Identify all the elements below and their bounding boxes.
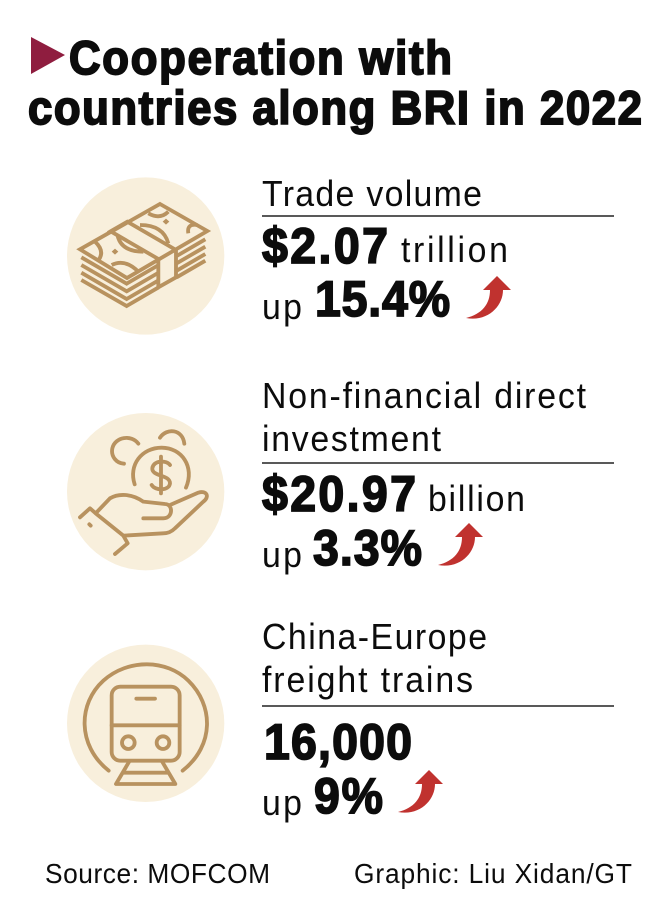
- label: non-financial direct investment: Non-financial direct: [262, 376, 586, 416]
- label: China-Europe freight trains: China-Europe: [262, 617, 487, 657]
- icon: red up arrow: [466, 276, 511, 319]
- graphic credit: Graphic: Liu Xidan/GT: [354, 857, 632, 889]
- panel: China-Europe freight trains: freight trains: [262, 660, 473, 700]
- panel: non-financial direct investment: [67, 376, 614, 576]
- icon: hand holding coin: [67, 413, 224, 570]
- label: trade volume: Trade volume: [262, 174, 482, 214]
- icon: title triangle marker: [31, 37, 65, 74]
- panel: China-Europe freight trains: [67, 617, 614, 824]
- change: up 15.4%: up: [262, 287, 302, 327]
- title: [28, 32, 642, 134]
- panel: trade volume: [67, 174, 614, 335]
- source credit: Source: MOFCOM: [45, 857, 270, 889]
- icon: stack of money: [67, 177, 224, 335]
- panel: trade volume: 15.4%: [315, 271, 450, 327]
- panel: non-financial direct investment: investment: [262, 419, 441, 459]
- value: 16,000: 16,000: [264, 714, 412, 770]
- icon: train: [67, 645, 224, 802]
- icon: red up arrow: [438, 523, 483, 566]
- title: Cooperation with: [69, 32, 452, 84]
- panel: trade volume: trillion: [401, 230, 508, 270]
- value: 2.07 trillion: $2.07: [262, 218, 388, 274]
- icon: red up arrow: [398, 770, 443, 813]
- panel: China-Europe freight trains: 9%: [314, 768, 383, 824]
- change: up 9%: up: [262, 783, 302, 823]
- change: up 3.3%: up: [262, 535, 302, 575]
- title: countries along BRI in 2022: [28, 82, 642, 134]
- value: 20.97 billion: $20.97: [262, 466, 416, 522]
- panel: non-financial direct investment: 3.3%: [313, 520, 422, 576]
- panel: non-financial direct investment: billion: [428, 479, 525, 519]
